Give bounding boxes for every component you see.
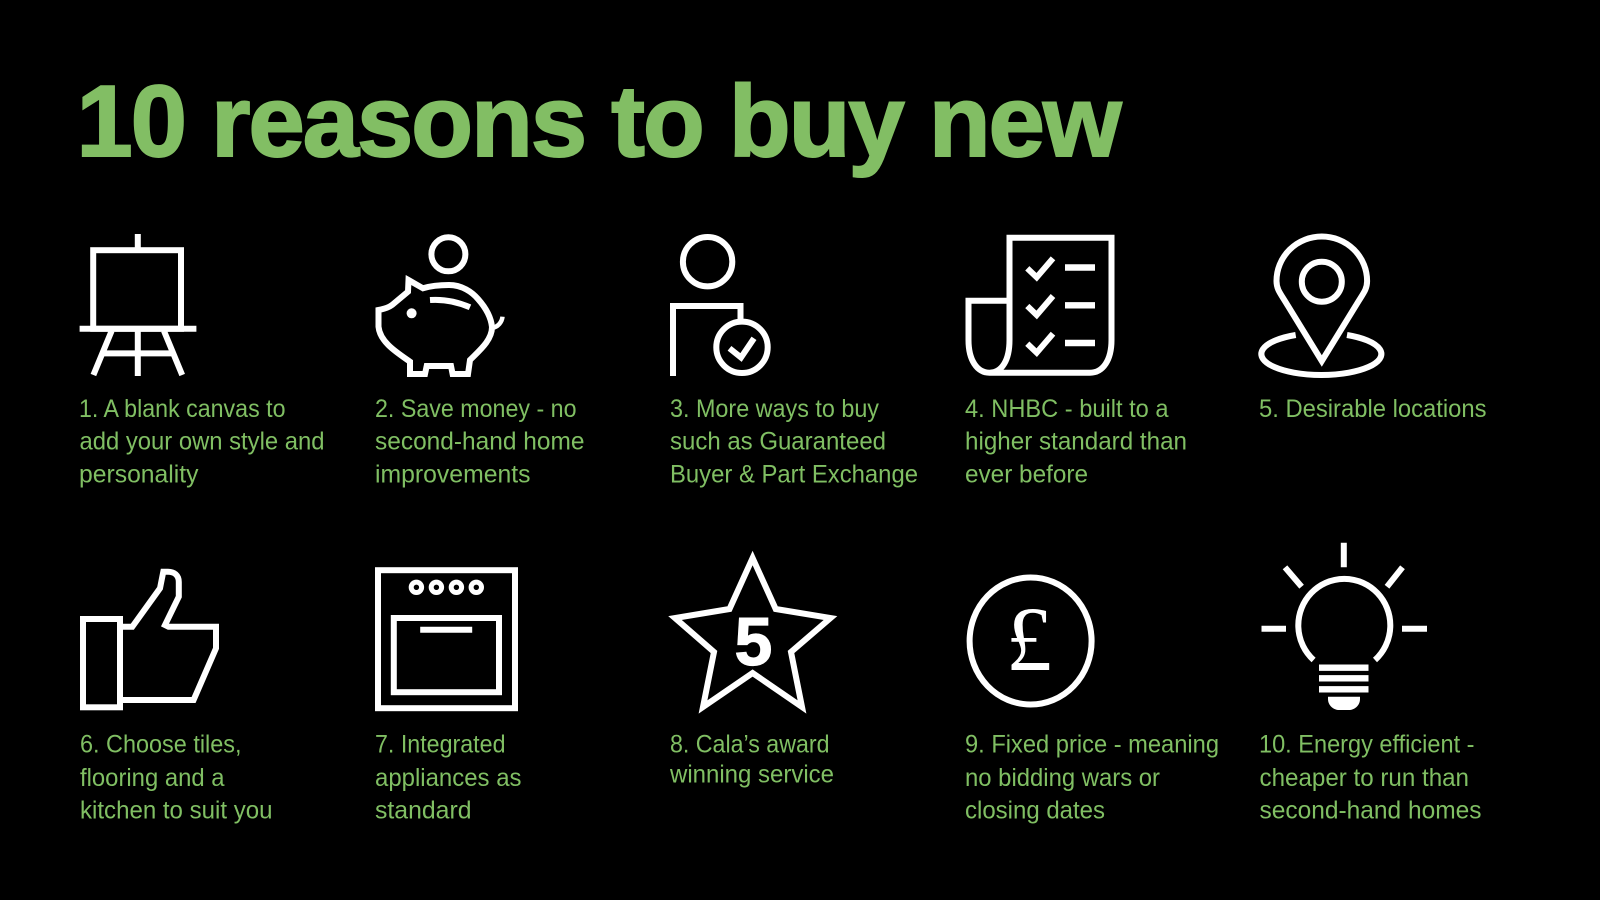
- text: reason 7: [375, 731, 522, 825]
- text: reason 1: [79, 395, 324, 488]
- text: reason 7: appliances as: [375, 764, 522, 792]
- text: reason 4: 4. NHBC - built to a: [965, 395, 1169, 423]
- icon: oven: [378, 570, 515, 708]
- text: reason 4: [965, 395, 1187, 488]
- reason 4: NHBC: [965, 238, 1187, 488]
- text: reason 10: second-hand homes: [1260, 797, 1482, 825]
- text: reason 9: 9. Fixed price - meaning: [965, 731, 1219, 759]
- icon: checklist scroll: [968, 238, 1112, 373]
- text: reason 9: closing dates: [965, 797, 1105, 825]
- icon: thumbs up: [83, 572, 216, 707]
- icon: pound coin: [970, 578, 1092, 704]
- icon: person with check badge: [673, 237, 768, 376]
- text: reason 2: 2. Save money - no: [375, 395, 576, 423]
- reason 3: more ways to buy: [670, 237, 918, 488]
- text: reason 3: [670, 395, 918, 488]
- text: reason 1: 1. A blank canvas to: [79, 395, 286, 423]
- text: reason 7: standard: [375, 797, 472, 825]
- text: reason 10: [1259, 731, 1482, 825]
- icon: piggy bank and coin: [378, 237, 502, 374]
- icon: light bulb: [1262, 543, 1427, 710]
- text: reason 9: [965, 731, 1219, 825]
- text: reason 6: 6. Choose tiles,: [80, 731, 242, 759]
- reason 10: energy efficient: [1259, 543, 1482, 825]
- reason 8: award winning service: [669, 558, 834, 789]
- text: reason 5: 5. Desirable locations: [1259, 395, 1486, 423]
- icon: five-star badge: [675, 558, 830, 707]
- reason 5: desirable locations: [1259, 236, 1486, 423]
- text: reason 2: [375, 395, 584, 488]
- icon: five-star badge: 5: [734, 604, 772, 680]
- text: reason 1: personality: [79, 460, 199, 488]
- text: reason 3: 3. More ways to buy: [670, 395, 879, 423]
- icon: map pin: [1261, 236, 1381, 375]
- text: reason 8: winning service: [669, 761, 834, 789]
- text: reason 8: [669, 731, 834, 789]
- text: reason 1: add your own style and: [80, 428, 324, 456]
- icon: pound coin: £: [1006, 588, 1052, 690]
- reason 1: blank canvas: [79, 234, 324, 488]
- text: reason 2: second-hand home: [375, 428, 584, 456]
- reason 7: integrated appliances: [375, 570, 522, 825]
- text: reason 4: ever before: [965, 460, 1088, 488]
- text: reason 9: no bidding wars or: [965, 764, 1160, 792]
- title: 10 reasons to buy new: [76, 66, 1122, 178]
- text: reason 6: kitchen to suit you: [80, 797, 272, 825]
- icon: easel: [80, 234, 196, 376]
- text: reason 4: higher standard than: [965, 428, 1187, 456]
- text: reason 8: 8. Cala’s award: [670, 731, 830, 759]
- reason 6: choose finishes: [80, 572, 272, 825]
- reason 9: fixed price: [965, 578, 1219, 825]
- text: reason 2: improvements: [375, 460, 530, 488]
- text: reason 3: such as Guaranteed: [670, 428, 886, 456]
- text: reason 10: cheaper to run than: [1260, 764, 1469, 792]
- text: reason 7: 7. Integrated: [375, 731, 506, 759]
- text: reason 10: 10. Energy efficient -: [1259, 731, 1474, 759]
- reason 2: save money: [375, 237, 584, 488]
- text: reason 6: flooring and a: [80, 764, 225, 792]
- text: reason 3: Buyer & Part Exchange: [670, 460, 918, 488]
- text: reason 6: [80, 731, 272, 825]
